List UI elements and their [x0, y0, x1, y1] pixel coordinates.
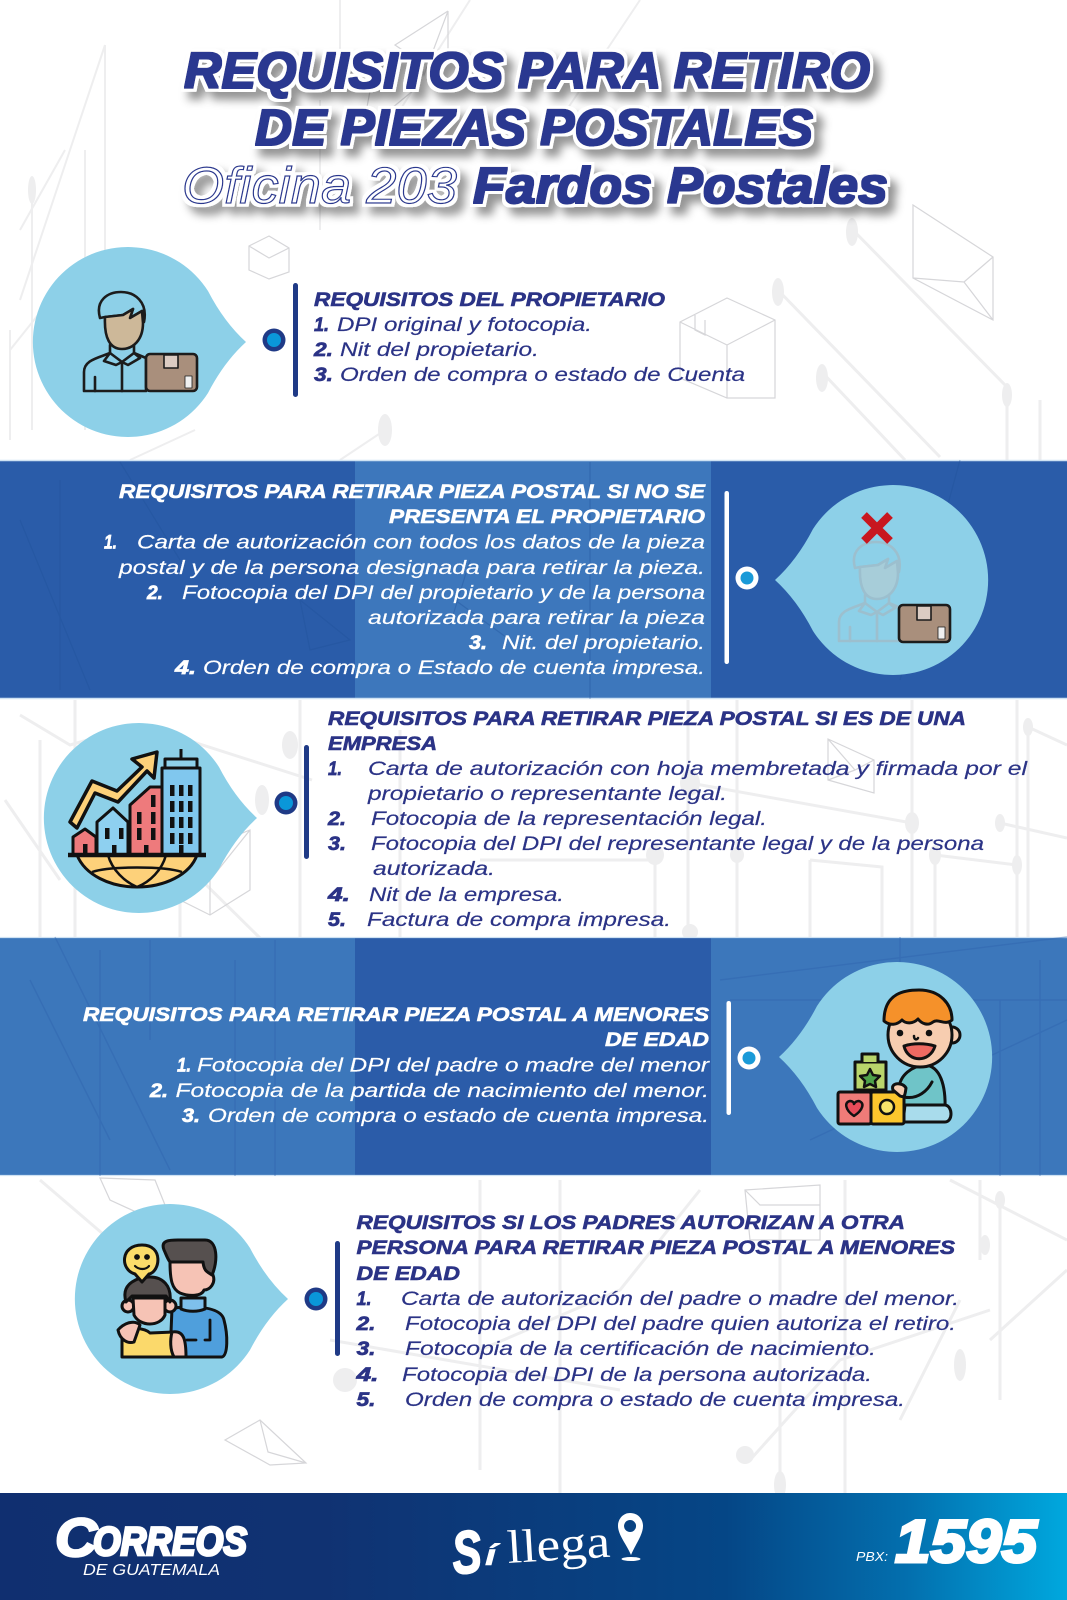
text block: Nit de la empresa. — [369, 884, 564, 906]
main title: REQUISITOS PARA RETIRO — [184, 42, 870, 99]
text block: 5. — [356, 1389, 376, 1411]
text block: Carta de autorización del padre o madre del menor. — [401, 1288, 959, 1310]
text block: Factura de compra impresa. — [367, 909, 671, 931]
icon: city growth on globe — [68, 749, 206, 887]
panel: company requirements — [44, 708, 1028, 931]
text block: 2. — [313, 339, 333, 361]
phone number: 1595 — [895, 1508, 1039, 1575]
text block: 5. — [328, 909, 346, 931]
text block: Orden de compra o estado de cuenta impresa. — [208, 1105, 709, 1127]
blue band — [0, 460, 1067, 699]
text block: propietario o representante legal. — [367, 783, 727, 805]
text block: postal y de la persona designada para retirar la pieza. — [118, 557, 705, 579]
text block: Orden de compra o estado de Cuenta — [340, 364, 745, 386]
speech bubble — [775, 485, 988, 675]
text block: 3. — [469, 632, 487, 654]
text block: Fotocopia de la representación legal. — [371, 808, 767, 830]
text block: 3. — [314, 364, 333, 386]
text block: Orden de compra o Estado de cuenta impresa. — [203, 657, 705, 679]
text block: Carta de autorización con todos los datos de la pieza — [137, 532, 705, 554]
speech bubble — [779, 962, 992, 1152]
phone number: PBX: — [856, 1549, 888, 1564]
text block: REQUISITOS SI LOS PADRES AUTORIZAN A OTRA — [356, 1212, 905, 1234]
text block: Carta de autorización con hoja membretada y firmada por el — [368, 758, 1028, 780]
background envelopes and boxes — [100, 11, 993, 1465]
text block: 3. — [328, 833, 346, 855]
footer — [0, 1493, 1067, 1600]
logo: Correos de Guatemala: DE GUATEMALA — [83, 1562, 220, 1579]
text block — [104, 481, 706, 679]
panel: owner requirements — [33, 247, 745, 437]
slogan: Si llega: llega — [505, 1516, 612, 1574]
icon: child with toy blocks — [838, 990, 960, 1124]
slogan: Si llega: í — [485, 1539, 501, 1572]
timeline bar and dot — [304, 1241, 340, 1356]
text block: 4. — [355, 1364, 378, 1386]
text block: 2. — [327, 808, 346, 830]
text block: 2. — [149, 1080, 168, 1102]
text block: REQUISITOS PARA RETIRAR PIEZA POSTAL SI NO SE — [119, 481, 706, 503]
icon: man with parcel — [84, 292, 197, 391]
text block: Orden de compra o estado de cuenta impresa. — [405, 1389, 905, 1411]
logo: Correos de Guatemala: ORREOS — [93, 1520, 247, 1564]
text block: REQUISITOS DEL PROPIETARIO — [314, 289, 665, 311]
panel: owner absent requirements — [0, 460, 1067, 699]
text block: Fotocopia del DPI del padre o madre del menor — [197, 1054, 711, 1076]
text block: 1. — [177, 1054, 191, 1076]
text block: autorizada para retirar la pieza — [368, 607, 705, 629]
text block: 4. — [174, 657, 196, 679]
slogan: Si llega — [449, 1516, 612, 1587]
speech bubble — [44, 723, 257, 913]
text block: Fotocopia de la certificación de nacimiento. — [405, 1338, 876, 1360]
text block: EMPRESA — [328, 733, 437, 755]
timeline bar and dot — [262, 283, 298, 397]
text block: 3. — [356, 1338, 376, 1360]
speech bubble — [75, 1204, 288, 1394]
text block: Fotocopia del DPI del propietario y de la persona — [182, 582, 705, 604]
speech bubble — [33, 247, 246, 437]
timeline bar and dot — [724, 491, 758, 664]
text block: PERSONA PARA RETIRAR PIEZA POSTAL A MENORES — [356, 1237, 955, 1259]
logo: Correos de Guatemala: C — [55, 1508, 98, 1568]
text block: 1. — [328, 758, 342, 780]
text block: 1. — [356, 1288, 372, 1310]
icon: crossed-out person with parcel — [839, 515, 950, 642]
text block: 1. — [104, 532, 117, 554]
logo: Correos de Guatemala — [55, 1508, 247, 1579]
text block: 2. — [146, 582, 163, 604]
text block: Fotocopia del DPI del representante legal y de la persona — [371, 833, 984, 855]
text block: REQUISITOS PARA RETIRAR PIEZA POSTAL A MENORES — [83, 1004, 709, 1026]
text block: autorizada. — [373, 858, 495, 880]
main title: DE PIEZAS POSTALES — [255, 99, 813, 156]
main title: Oficina 203 — [182, 157, 457, 214]
text block: 1. — [314, 314, 329, 336]
text block: REQUISITOS PARA RETIRAR PIEZA POSTAL SI ES DE UNA — [328, 708, 966, 730]
main title: Fardos Postales — [473, 157, 888, 214]
text block: Fotocopia de la partida de nacimiento del menor. — [176, 1080, 709, 1102]
blue band — [0, 937, 1067, 1176]
text block — [313, 289, 745, 386]
text block — [327, 708, 1028, 931]
timeline bar and dot — [274, 745, 309, 859]
text block: Fotocopia del DPI del padre quien autoriza el retiro. — [405, 1313, 956, 1335]
icon: parent with child — [118, 1240, 227, 1357]
panel: minors requirements — [0, 937, 1067, 1176]
text block: Fotocopia del DPI de la persona autorizada. — [402, 1364, 872, 1386]
footer band — [0, 1493, 1067, 1600]
text block: PRESENTA EL PROPIETARIO — [389, 506, 705, 528]
main title — [182, 42, 888, 214]
text block: DE EDAD — [356, 1263, 460, 1285]
text block — [83, 1004, 711, 1127]
text block: 3. — [182, 1105, 200, 1127]
text block: DPI original y fotocopia. — [337, 314, 592, 336]
text block: 2. — [355, 1313, 376, 1335]
text block: Nit del propietario. — [340, 339, 539, 361]
slogan: Si llega: S — [449, 1518, 484, 1587]
icon: location pin — [618, 1513, 643, 1561]
text block: DE EDAD — [605, 1029, 709, 1051]
panel: parents authorize another person — [75, 1204, 959, 1411]
text block: 4. — [327, 884, 350, 906]
timeline bar and dot — [726, 1001, 760, 1115]
text block: Nit. del propietario. — [502, 632, 705, 654]
text block — [355, 1212, 959, 1411]
